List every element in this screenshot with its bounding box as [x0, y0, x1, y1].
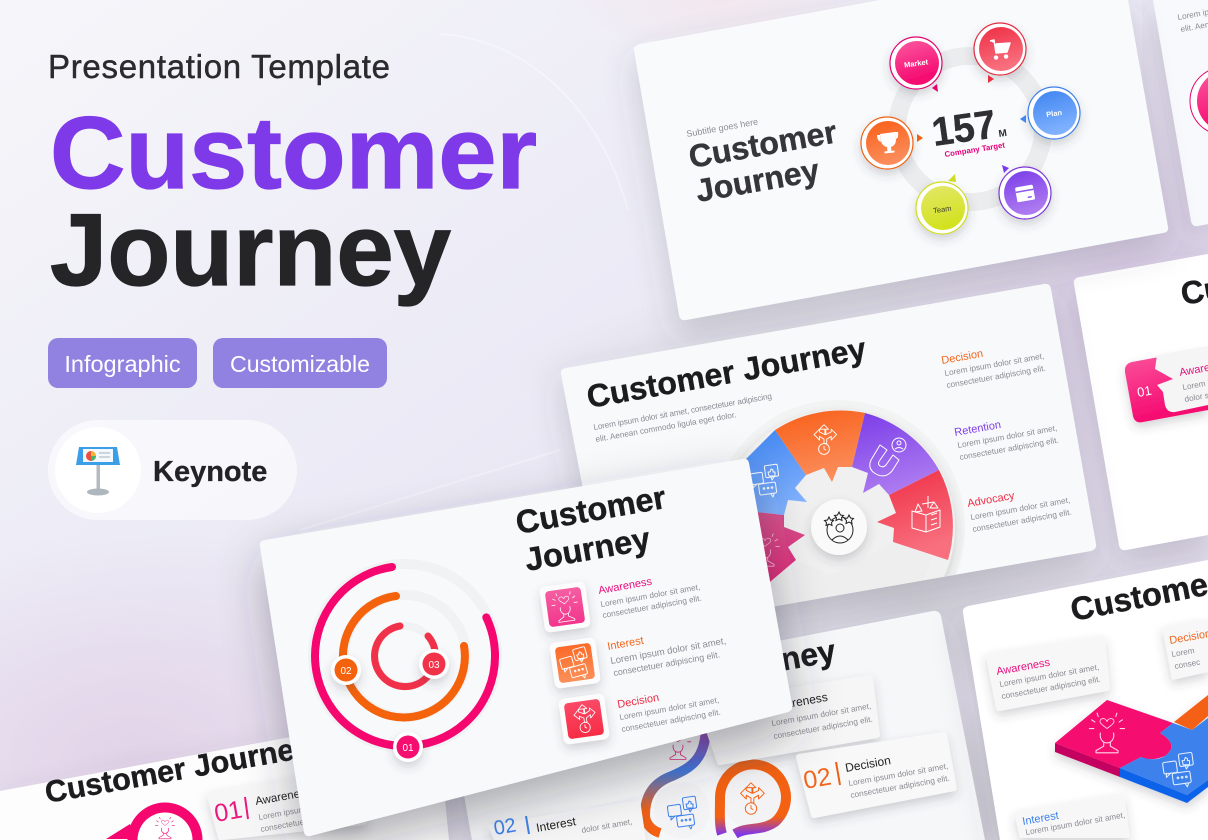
center number: 157	[929, 102, 999, 155]
tag: infographic	[48, 338, 197, 388]
icon tile: decision	[558, 693, 610, 745]
cycle arrows	[917, 75, 1026, 182]
text: decision	[616, 692, 721, 734]
slide title: Customer	[513, 479, 669, 541]
badge 01: 01	[402, 743, 414, 754]
center number: M	[998, 128, 1008, 140]
sector: orange	[775, 410, 865, 482]
item: advocacy	[966, 490, 1072, 534]
icon: person	[155, 817, 175, 839]
slide title: Custome	[1067, 566, 1208, 628]
icon: arrows	[814, 425, 837, 454]
node: trophy	[861, 117, 913, 169]
node: market: Market	[903, 57, 929, 70]
badge 02: 02	[340, 666, 352, 677]
slide: top customer journey with target cycle	[634, 0, 1168, 320]
icon tile: awareness	[539, 581, 591, 633]
node: team: Team	[932, 204, 952, 215]
title: journey: Journey	[50, 193, 451, 307]
sector: purple	[852, 413, 939, 495]
tag: infographic: Infographic	[64, 351, 181, 377]
rings chart	[313, 564, 497, 762]
item: decision: Decision	[940, 348, 984, 367]
hub	[811, 499, 867, 555]
node: plan	[1028, 87, 1080, 139]
tile: awareness: consectetuer adipiscing elit.	[773, 715, 873, 741]
slide: customer journey wheel	[561, 284, 1096, 654]
icon: magnet	[870, 438, 906, 476]
sector: blue	[745, 430, 807, 515]
slide: right middle partial	[1074, 254, 1208, 550]
tag: customizable: Customizable	[230, 351, 370, 377]
pink ring	[106, 802, 202, 840]
text: interest: consectetuer adipiscing elit.	[613, 649, 721, 678]
icon: book and scales	[912, 496, 940, 532]
icon: chat	[667, 796, 697, 829]
tile: decision: consectetuer adipiscing elit.	[850, 774, 950, 800]
tile: awareness	[989, 639, 1107, 708]
tile: decision	[799, 735, 954, 815]
intro text: elit. Aenean commodo ligula eget dolor.	[595, 410, 737, 444]
wheel	[734, 404, 965, 606]
text: awareness: consectetuer adipiscing elit.	[602, 594, 702, 620]
ring: orange	[343, 596, 465, 717]
ring: red	[375, 626, 436, 687]
tile: interest: Interest	[1021, 810, 1060, 828]
item: advocacy: Advocacy	[966, 490, 1016, 510]
tile: awareness: Lorem ipsum dolor sit amet,	[999, 663, 1100, 689]
sector: red	[877, 470, 953, 560]
tile: decision: Lorem ipsum dolor sit amet,	[848, 762, 949, 788]
snake path	[645, 725, 786, 834]
icon: chat	[1162, 752, 1193, 787]
slide title	[513, 479, 669, 578]
tile: awareness: Awareness	[995, 657, 1051, 678]
tile: interest: Lorem ipsum dolor sit amet,	[1025, 811, 1126, 837]
slide title	[686, 114, 839, 209]
tile: interest: Interest	[535, 814, 578, 835]
snake path discs	[654, 766, 784, 838]
node: plan: Plan	[1046, 108, 1063, 119]
text: decision: Lorem ipsum dolor sit amet,	[619, 696, 720, 722]
intro text: Lorem ipsum dolor sit amet, consectetuer adipiscing	[593, 392, 773, 432]
tile: awareness: Lorem ipsum dolor sit amet,	[771, 702, 872, 728]
item: advocacy: Lorem ipsum dolor sit amet,	[970, 496, 1071, 522]
tile: interest	[488, 800, 646, 840]
center number: Company Target	[944, 140, 1006, 159]
slide title: Customer	[686, 114, 839, 175]
item: decision: consectetuer adipiscing elit.	[946, 364, 1046, 390]
slide title: Journey	[522, 520, 653, 578]
text: awareness: Lorem ipsum dolor sit amet,	[600, 583, 701, 609]
tile: decision: consec	[1174, 658, 1201, 671]
item: retention: consectetuer adipiscing elit.	[959, 436, 1059, 462]
tag: customizable	[213, 338, 387, 388]
tile: awareness: Awareness	[254, 786, 313, 808]
icon: keynote podium	[76, 447, 120, 496]
slide title: Journey	[693, 152, 822, 209]
tile: interest: dolor sit amet,	[581, 817, 633, 835]
item: decision: Lorem ipsum dolor sit amet,	[944, 352, 1045, 378]
item: decision	[940, 348, 1046, 390]
node: team	[916, 182, 968, 234]
icon: pink circle	[1190, 67, 1208, 135]
item: retention	[953, 419, 1059, 462]
slide: bottom right puzzle	[963, 560, 1208, 840]
node: market	[890, 37, 942, 89]
text: awareness: Awareness	[597, 576, 653, 597]
slide: bottom middle with path	[448, 611, 985, 840]
tile: awareness: consectetuer adipiscing elit.	[1001, 675, 1101, 701]
badge 01	[393, 732, 423, 762]
slide: top right partial	[1153, 0, 1208, 226]
lower wheel	[770, 542, 898, 582]
icon: person	[665, 731, 691, 759]
tile: awareness 01	[1125, 346, 1208, 422]
text: interest: Interest	[606, 635, 645, 653]
tile: awareness	[210, 770, 364, 837]
badge 02	[331, 655, 361, 685]
icon tile: interest	[549, 637, 601, 689]
title: customer: Customer	[50, 96, 537, 210]
tile: interest	[1014, 793, 1130, 838]
item: retention: Lorem ipsum dolor sit amet,	[957, 424, 1058, 450]
tile: decision: Decision	[844, 753, 892, 775]
heading: presentation template: Presentation Template	[48, 48, 390, 85]
text: interest: Lorem ipsum dolor sit amet,	[610, 636, 727, 667]
slide: customer journey rings	[260, 459, 792, 836]
node: card	[999, 167, 1051, 219]
item: retention: Retention	[953, 419, 1002, 439]
text: decision: consectetuer adipiscing elit.	[621, 708, 721, 734]
tile: awareness	[700, 678, 877, 762]
badge 03: 03	[428, 660, 440, 671]
label: keynote: Keynote	[153, 456, 267, 488]
node: cart	[974, 23, 1026, 75]
ring: pink	[315, 567, 495, 746]
tile: awareness 01: 01	[1136, 383, 1153, 400]
tile: awareness: consectetuer adipiscing elit.	[260, 808, 360, 834]
tile: awareness: Awareness	[768, 690, 829, 714]
tile: decision: Lorem	[1171, 646, 1195, 659]
subtitle: Subtitle goes here	[686, 117, 759, 139]
tile: awareness: 01	[212, 796, 244, 828]
icon: chat	[749, 464, 779, 497]
icon: person with stars	[824, 512, 854, 543]
slide title: Customer Journey	[554, 632, 838, 717]
badge 03	[419, 649, 449, 679]
icon: person	[1089, 713, 1125, 753]
sector: pink	[758, 512, 805, 582]
cycle backdrop	[897, 56, 1043, 202]
tile: interest: 02	[492, 814, 518, 840]
icon: person	[751, 534, 779, 566]
tile: awareness: Lorem ipsum dolor sit amet,	[258, 796, 359, 822]
slide: bottom left	[0, 710, 449, 840]
text: decision: Decision	[616, 692, 660, 711]
slide title: Customer Journe	[42, 733, 297, 810]
item: advocacy: consectetuer adipiscing elit.	[972, 508, 1072, 534]
slide title: Customer Journey	[584, 330, 869, 415]
puzzle	[1055, 695, 1208, 803]
tile: decision: 02	[801, 763, 833, 795]
icon: arrows	[741, 783, 764, 814]
badge: keynote	[48, 420, 297, 520]
text: awareness	[597, 576, 702, 620]
tile: decision	[1162, 619, 1208, 680]
